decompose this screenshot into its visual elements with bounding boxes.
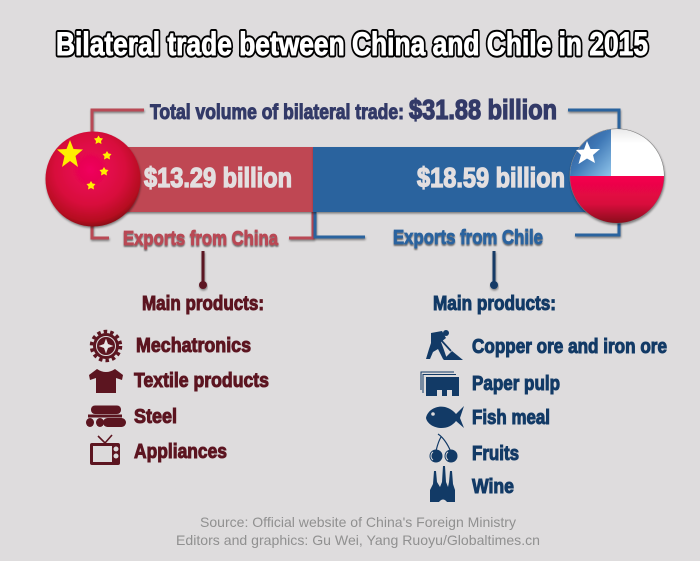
total volume heading: $31.88 billion (409, 94, 557, 125)
heading: China main products: Main products: (142, 293, 264, 315)
bar: exports from Chile (313, 147, 593, 212)
label: exports from Chile: Exports from Chile (393, 227, 543, 249)
icon: cherries (430, 434, 458, 462)
bar: exports from China (120, 147, 313, 212)
item: Wine: Wine (472, 476, 514, 498)
source note: Editors and graphics: Gu Wei, Yang Ruoyu/Globaltimes.cn (176, 532, 540, 548)
icon: miner (426, 330, 463, 360)
heading: Chile main products: Main products: (433, 293, 556, 315)
total volume heading: Total volume of bilateral trade: (150, 101, 404, 124)
bar: exports from Chile: $18.59 billion (417, 162, 565, 193)
icon: fish (426, 406, 464, 428)
icon: gear (92, 332, 120, 360)
icon: paper stacks (421, 372, 459, 396)
item: Fruits: Fruits (472, 443, 519, 465)
bracket: red top and bottom (92, 110, 313, 238)
label: exports from China: Exports from China (123, 228, 279, 250)
item: Appliances: Appliances (134, 441, 227, 463)
icon: t-shirt (89, 369, 123, 393)
item: Fish meal: Fish meal (472, 407, 550, 429)
source note (176, 514, 540, 548)
icon: wine bottles (430, 466, 455, 502)
bracket: blue (315, 110, 619, 237)
connector: Chile (490, 251, 498, 289)
icon: China flag (46, 132, 140, 226)
item: Textile products: Textile products (134, 370, 269, 392)
icon: steel pipes (86, 406, 126, 427)
total volume heading (150, 94, 557, 125)
item: Mechatronics: Mechatronics (136, 335, 251, 357)
item: Copper ore and iron ore: Copper ore and iron ore (472, 336, 667, 358)
bar: exports from China: $13.29 billion (144, 162, 292, 193)
item: Paper pulp: Paper pulp (472, 373, 560, 395)
connector: China (199, 251, 207, 289)
source note: Source: Official website of China's Foreign Ministry (200, 514, 516, 530)
icon: Chile flag (570, 128, 664, 224)
item: Steel: Steel (134, 406, 177, 428)
icon: television (90, 435, 120, 465)
